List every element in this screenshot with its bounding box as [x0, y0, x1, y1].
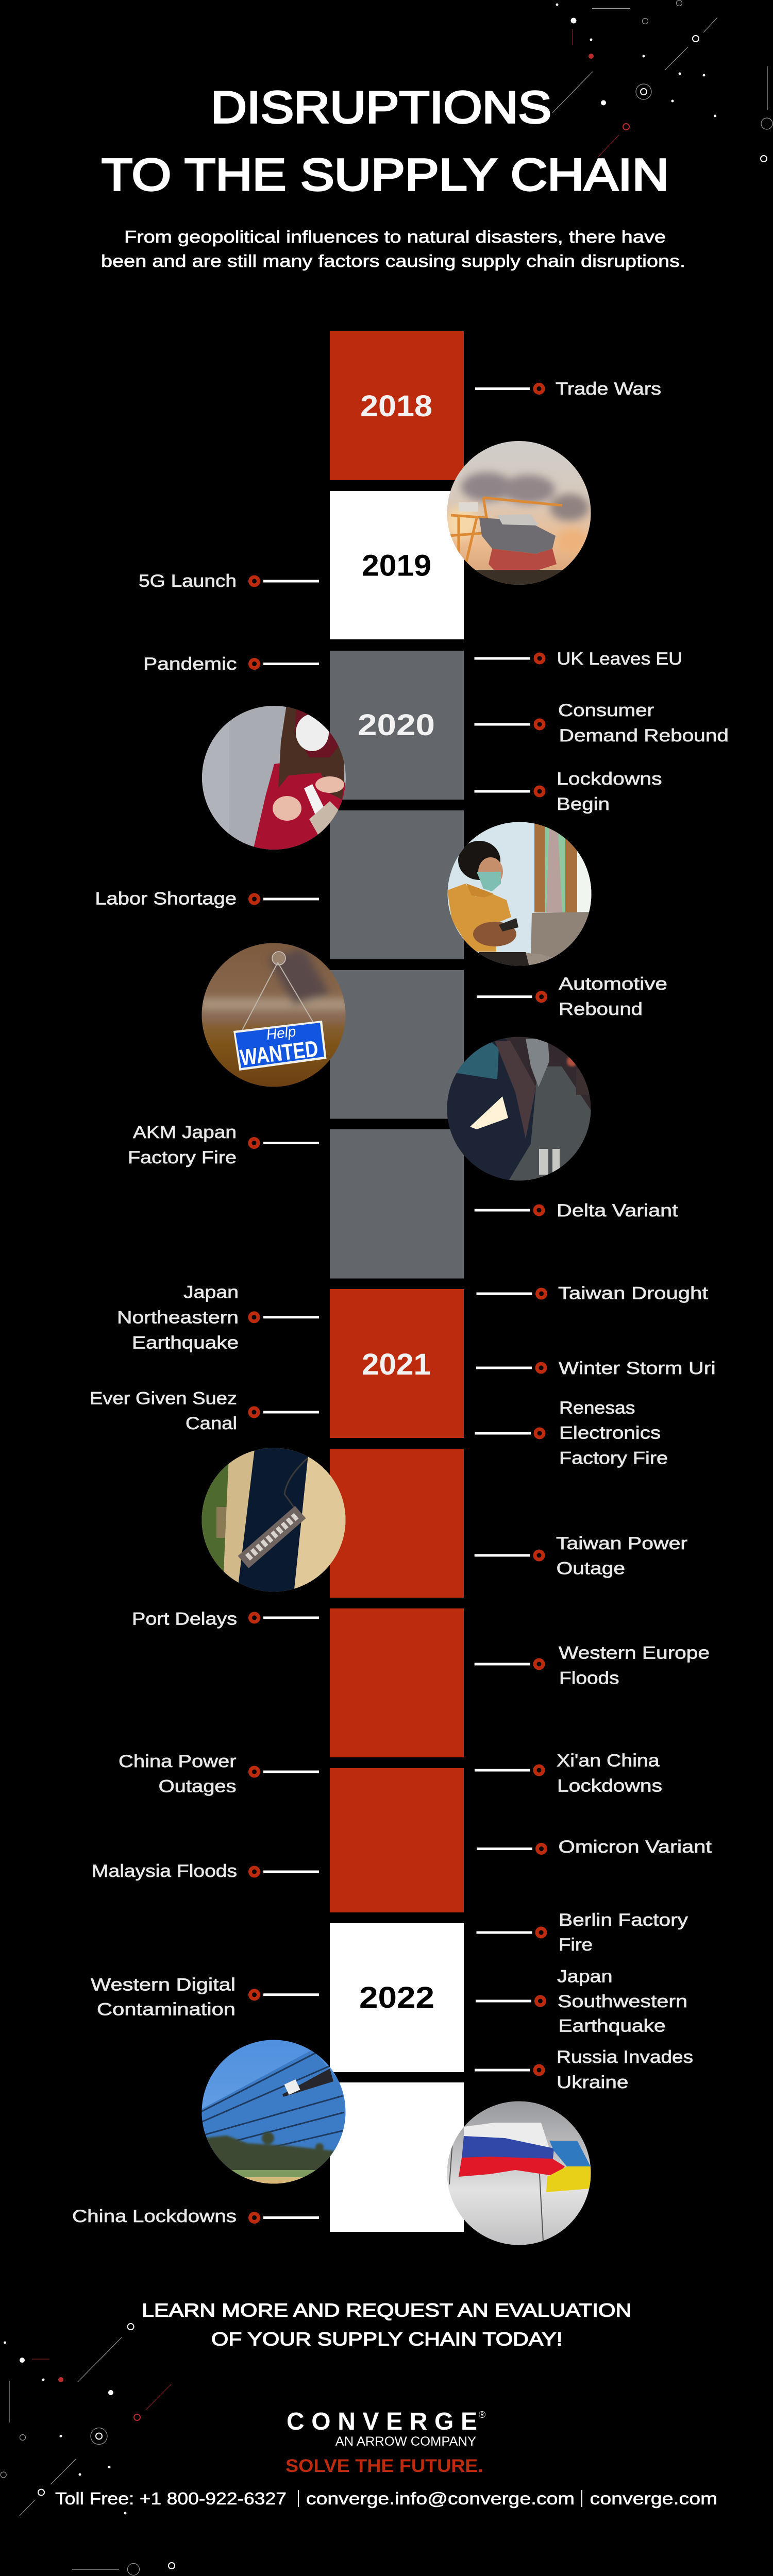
event: Renesas Electronics Factory Fire: Renesas	[559, 1398, 635, 1418]
photo: Ever Given blocking Suez Canal	[198, 1445, 350, 1595]
timeline bar: 2019	[330, 491, 464, 639]
title	[102, 82, 669, 200]
event: Japan Northeastern Earthquake: Northeastern	[117, 1308, 239, 1328]
event: Japan Northeastern Earthquake: Japan	[183, 1283, 239, 1302]
call to action heading: OF YOUR SUPPLY CHAIN TODAY!	[211, 2329, 563, 2349]
contact details: converge.com	[590, 2489, 717, 2508]
photo: help wanted sign	[198, 940, 350, 1090]
event: Malaysia Floods: Malaysia Floods	[92, 1861, 237, 1881]
event: Japan Northeastern Earthquake: Earthquake	[132, 1333, 239, 1353]
contact details: Toll Free: +1 800-922-6327	[55, 2489, 287, 2508]
event: AKM Japan Factory Fire: AKM Japan	[133, 1123, 237, 1142]
photo: cargo ship at port	[447, 441, 591, 585]
call to action heading	[142, 2300, 632, 2349]
timeline bar: 2022: 2022	[359, 1981, 434, 2014]
decoration: network dots top right	[552, 0, 772, 162]
timeline bar: 2021	[330, 1289, 464, 1912]
event: Russia Invades Ukraine	[475, 2047, 693, 2092]
event: Western Europe Floods: Western Europe	[559, 1643, 710, 1663]
decoration: network dots bottom left	[1, 2324, 175, 2575]
logo: Converge: CONVERGE	[287, 2408, 477, 2435]
event: Russia Invades Ukraine: Ukraine	[557, 2073, 628, 2092]
photo: woman in mask with sanitizer	[198, 703, 350, 853]
event: Taiwan Drought	[476, 1284, 709, 1303]
photo: man in mask with phone	[446, 819, 595, 969]
event: AKM Japan Factory Fire: Factory Fire	[128, 1148, 237, 1167]
event: Consumer Demand Rebound: Consumer	[558, 701, 654, 720]
event: Malaysia Floods	[92, 1861, 319, 1881]
event: Xi'an China Lockdowns: Lockdowns	[557, 1776, 662, 1796]
event: Western Europe Floods	[475, 1643, 710, 1688]
event: Japan Southwestern Earthquake: Earthquake	[559, 2016, 666, 2036]
timeline bar: 2020: 2020	[358, 708, 435, 742]
event: UK Leaves EU	[474, 649, 682, 669]
event: Consumer Demand Rebound	[474, 701, 729, 745]
event: Ever Given Suez Canal: Canal	[186, 1414, 237, 1433]
logo: Converge: AN ARROW COMPANY	[335, 2434, 476, 2449]
event: Japan Southwestern Earthquake: Southwestern	[558, 1992, 687, 2011]
timeline bar: 2021: 2021	[362, 1348, 431, 1381]
tagline: SOLVE THE FUTURE.	[285, 2456, 483, 2476]
photo: Western Digital building	[198, 2038, 350, 2188]
timeline bar: 2020	[330, 651, 464, 1279]
event: Omicron Variant: Omicron Variant	[559, 1837, 712, 1857]
event: Pandemic	[143, 654, 319, 674]
event: China Lockdowns	[72, 2207, 319, 2226]
event: Port Delays: Port Delays	[132, 1609, 237, 1629]
event: Berlin Factory Fire	[476, 1910, 688, 1955]
timeline bar: 2018: 2018	[360, 389, 432, 423]
event: China Power Outages: Outages	[159, 1777, 237, 1797]
event: Renesas Electronics Factory Fire	[475, 1398, 668, 1468]
event: Automotive Rebound: Automotive	[559, 974, 667, 994]
intro text: From geopolitical influences to natural disasters, there have	[124, 227, 666, 246]
event: Renesas Electronics Factory Fire: Factory Fire	[559, 1449, 668, 1468]
event: Ever Given Suez Canal: Ever Given Suez	[90, 1389, 237, 1409]
event: Japan Southwestern Earthquake	[476, 1967, 687, 2036]
event: Taiwan Power Outage: Outage	[557, 1559, 625, 1579]
event: Taiwan Power Outage	[475, 1534, 687, 1579]
event: Omicron Variant	[477, 1837, 712, 1857]
event: Consumer Demand Rebound: Demand Rebound	[559, 726, 729, 745]
event: Western Europe Floods: Floods	[559, 1668, 619, 1688]
event: Berlin Factory Fire: Fire	[559, 1935, 593, 1955]
event: Trade Wars	[475, 379, 661, 399]
event: Western Digital Contamination	[91, 1975, 319, 2020]
intro text	[101, 227, 685, 270]
event: UK Leaves EU: UK Leaves EU	[557, 649, 682, 669]
timeline bar: 2019: 2019	[362, 549, 431, 582]
event: 5G Launch: 5G Launch	[139, 571, 237, 591]
title: TO THE SUPPLY CHAIN	[102, 150, 669, 200]
timeline bar: 2022	[330, 1923, 464, 2232]
event: Western Digital Contamination: Western Digital	[91, 1975, 236, 1995]
photo: Russian and Ukrainian flags	[446, 2099, 593, 2246]
event: Automotive Rebound	[477, 974, 667, 1019]
event: Automotive Rebound: Rebound	[559, 999, 643, 1019]
event: Lockdowns Begin: Lockdowns	[557, 769, 662, 789]
event: Ever Given Suez Canal	[90, 1389, 319, 1433]
photo: help wanted sign: WANTED	[239, 1036, 320, 1071]
photo: cars in traffic	[446, 1036, 593, 1182]
event: Russia Invades Ukraine: Russia Invades	[557, 2047, 693, 2067]
contact details	[55, 2489, 717, 2508]
timeline bar: 2018	[330, 331, 464, 480]
call to action heading: LEARN MORE AND REQUEST AN EVALUATION	[142, 2300, 632, 2320]
event: Winter Storm Uri	[476, 1359, 716, 1378]
event: Pandemic: Pandemic	[143, 654, 237, 674]
event: 5G Launch	[139, 571, 319, 591]
event: Berlin Factory Fire: Berlin Factory	[559, 1910, 688, 1930]
event: Japan Northeastern Earthquake	[117, 1283, 319, 1353]
photo: help wanted sign: Help	[265, 1023, 297, 1043]
event: Port Delays	[132, 1609, 319, 1629]
event: Trade Wars: Trade Wars	[556, 379, 661, 399]
contact details: converge.info@converge.com	[306, 2489, 575, 2508]
event: China Power Outages	[119, 1752, 319, 1797]
event: AKM Japan Factory Fire	[128, 1123, 319, 1167]
event: Taiwan Drought: Taiwan Drought	[558, 1284, 709, 1303]
logo: Converge	[287, 2408, 485, 2449]
event: Delta Variant	[475, 1201, 678, 1221]
event: Xi'an China Lockdowns: Xi'an China	[557, 1751, 660, 1770]
event: Taiwan Power Outage: Taiwan Power	[556, 1534, 687, 1553]
event: Renesas Electronics Factory Fire: Electronics	[559, 1423, 661, 1443]
event: Japan Southwestern Earthquake: Japan	[557, 1967, 613, 1986]
event: China Lockdowns: China Lockdowns	[72, 2207, 237, 2226]
event: China Power Outages: China Power	[119, 1752, 236, 1771]
event: Delta Variant: Delta Variant	[557, 1201, 678, 1221]
logo: Converge: ®	[479, 2410, 485, 2420]
event: Labor Shortage	[95, 889, 319, 909]
event: Western Digital Contamination: Contamination	[97, 2000, 236, 2020]
event: Lockdowns Begin	[474, 769, 662, 814]
intro text: been and are still many factors causing supply chain disruptions.	[101, 251, 685, 270]
title: DISRUPTIONS	[211, 82, 551, 132]
event: Xi'an China Lockdowns	[475, 1751, 662, 1796]
event: Lockdowns Begin: Begin	[557, 794, 610, 814]
event: Winter Storm Uri: Winter Storm Uri	[559, 1359, 716, 1378]
event: Labor Shortage: Labor Shortage	[95, 889, 237, 909]
